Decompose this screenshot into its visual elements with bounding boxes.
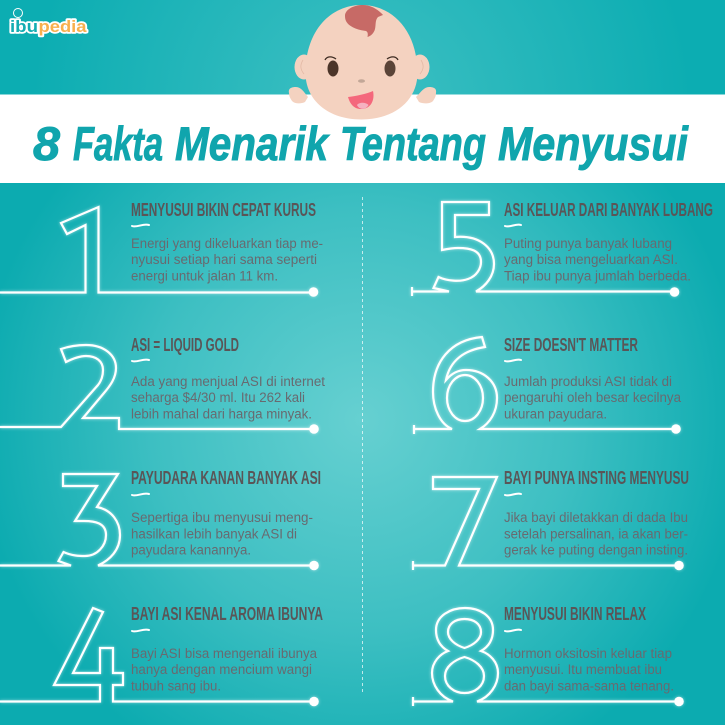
title banner (0, 94, 725, 183)
baby hands (289, 87, 436, 103)
body 6 (504, 374, 681, 422)
squiggle 4 (132, 630, 149, 631)
panel: fact 3 (0, 467, 321, 570)
squiggle 6 (505, 360, 521, 361)
numeral 1 (0, 207, 318, 297)
numeral 3 (0, 474, 319, 570)
body 3 (131, 510, 313, 558)
body 1 (131, 236, 323, 284)
baby mouth (348, 91, 374, 109)
baby head (305, 5, 418, 120)
panel: fact 5 (412, 199, 713, 297)
squiggle 5 (505, 225, 521, 226)
body 2: seharga $4/30 ml. Itu 262 kali (131, 390, 305, 405)
baby ears (294, 54, 430, 80)
panel: fact 7 (413, 467, 689, 570)
body 5: Tiap ibu punya jumlah berbeda. (504, 268, 691, 284)
panel: fact 4 (0, 603, 323, 706)
heading 8: MENYUSUI BIKIN RELAX (504, 603, 646, 624)
background: main teal panel (0, 183, 725, 725)
body 5: Puting punya banyak lubang (504, 236, 672, 251)
body 4: Bayi ASI bisa mengenali ibunya (131, 646, 317, 661)
body 7 (504, 510, 688, 558)
center dashed divider (362, 197, 364, 694)
body 7: gerak ke puting dengan insting. (504, 542, 688, 558)
body 6: Jumlah produksi ASI tidak di (504, 374, 672, 389)
squiggle 3 (132, 494, 149, 495)
title: Menyusui (498, 117, 689, 170)
numeral 8 (413, 608, 684, 706)
heading 6: SIZE DOESN'T MATTER (504, 334, 638, 355)
logo: iBupedia (10, 9, 87, 36)
body 6: pengaruhi oleh besar kecilnya (504, 390, 681, 405)
title (33, 117, 689, 170)
body 1: Energi yang dikeluarkan tiap me- (131, 236, 323, 251)
numeral 6 (414, 337, 681, 434)
baby nose (358, 79, 365, 83)
title: Fakta (73, 117, 163, 170)
baby eyes (325, 57, 398, 76)
title: Tentang (340, 117, 486, 170)
numeral 7 (413, 477, 684, 570)
body 2: Ada yang menjual ASI di internet (131, 374, 325, 389)
squiggle 2 (132, 360, 149, 361)
title: 8 (33, 117, 61, 170)
numeral 4 (0, 608, 319, 706)
numeral 2 (0, 345, 319, 434)
icon: baby face (289, 5, 436, 120)
panel: fact 6 (414, 334, 681, 434)
baby hair (345, 5, 383, 37)
body 1: energi untuk jalan 11 km. (131, 268, 278, 284)
title: Menarik (175, 117, 330, 170)
squiggle 7 (505, 494, 521, 495)
numeral 5 (412, 202, 679, 297)
body 3: payudara kanannya. (131, 542, 251, 558)
body 5 (504, 236, 691, 284)
body 3: Sepertiga ibu menyusui meng- (131, 510, 313, 525)
body 8: Hormon oksitosin keluar tiap (504, 646, 672, 661)
logo: iBupedia: pedia (38, 17, 87, 36)
background: top band (0, 0, 725, 95)
body 7: setelah persalinan, ia akan ber- (504, 526, 688, 542)
body 6: ukuran payudara. (504, 406, 607, 422)
body 1: nyusui setiap hari sama seperti (131, 252, 317, 267)
panel: fact 2 (0, 334, 325, 434)
squiggle 8 (505, 630, 521, 631)
heading 1: MENYUSUI BIKIN CEPAT KURUS (131, 199, 316, 220)
body 8: dan bayi sama-sama tenang. (504, 678, 674, 694)
squiggle 1 (132, 225, 149, 226)
panel: fact 1 (0, 199, 323, 297)
body 2: lebih mahal dari harga minyak. (131, 406, 312, 422)
heading 4: BAYI ASI KENAL AROMA IBUNYA (131, 603, 323, 624)
heading 2: ASI = LIQUID GOLD (131, 334, 239, 355)
body 2 (131, 374, 325, 422)
body 5: yang bisa mengeluarkan ASI. (504, 252, 678, 267)
body 4 (131, 646, 317, 694)
body 3: hasilkan lebih banyak ASI di (131, 526, 297, 542)
panel: fact 8 (413, 603, 684, 706)
body 8: menyusui. Itu membuat ibu (504, 662, 662, 677)
body 4: hanya dengan mencium wangi (131, 662, 312, 677)
body 8 (504, 646, 674, 694)
heading 3: PAYUDARA KANAN BANYAK ASI (131, 467, 321, 488)
body 7: Jika bayi diletakkan di dada Ibu (504, 510, 688, 525)
logo: iBupedia: ibu (10, 17, 38, 36)
body 4: tubuh sang ibu. (131, 678, 221, 694)
